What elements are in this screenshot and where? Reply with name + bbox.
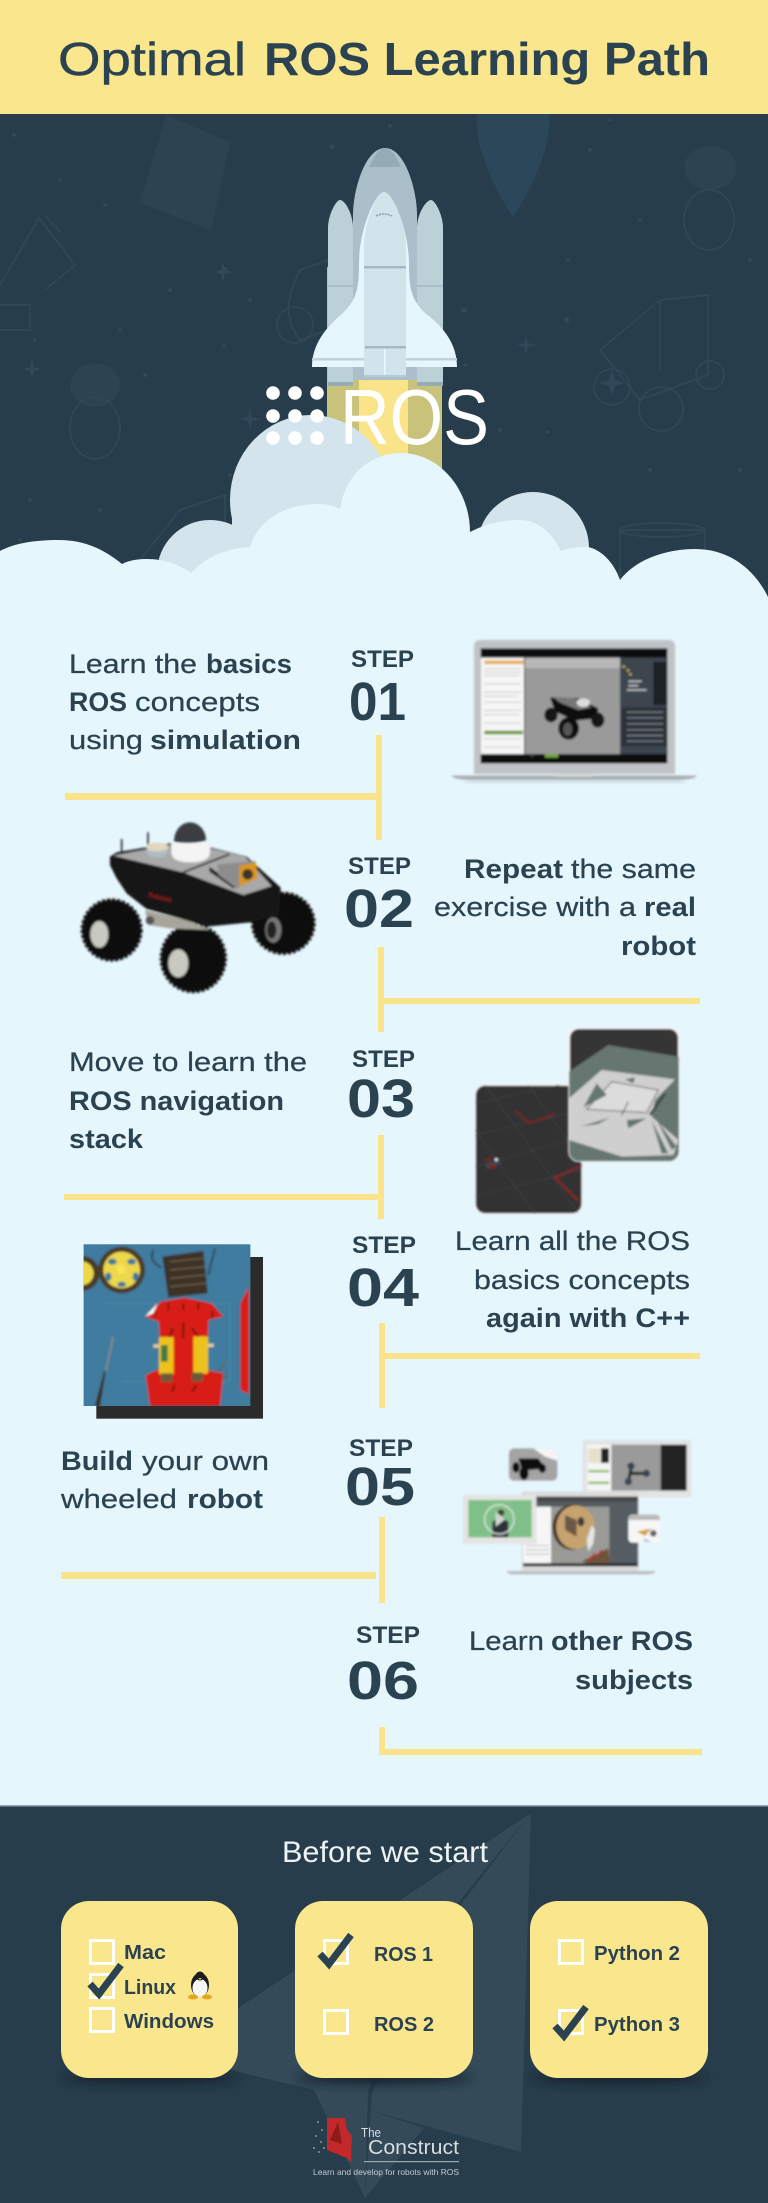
icon: linux penguin — [188, 1972, 212, 2000]
step 03 label — [347, 1046, 415, 1129]
step 02 text: real — [644, 892, 696, 922]
navigation screenshots — [475, 1028, 679, 1214]
logo text: Learn and develop for robots with ROS — [313, 2167, 459, 2177]
step 02 text: Repeat — [464, 854, 563, 884]
card: operating system: Windows — [124, 2011, 214, 2033]
step 05 label: STEP — [349, 1435, 413, 1462]
card: python version — [530, 1901, 708, 2084]
logo text: The — [361, 2125, 381, 2140]
step 03 — [69, 1028, 679, 1214]
main tank — [353, 148, 417, 380]
icon: check mark — [320, 1935, 351, 1964]
step 06 label: STEP — [356, 1622, 420, 1649]
card: operating system — [61, 1901, 238, 2084]
rocket — [312, 148, 457, 477]
sky background — [0, 114, 768, 614]
title — [58, 33, 710, 85]
step 02 text: the same — [571, 854, 696, 884]
step 04 text: basics concepts — [474, 1265, 690, 1295]
step 03 label: 03 — [347, 1069, 415, 1129]
robot photo: Robotnik — [148, 892, 173, 904]
step 01 text: ROS — [69, 687, 127, 717]
step 05 label — [345, 1435, 415, 1517]
step 03 text: ROS navigation — [69, 1086, 284, 1116]
footer heading: Before we start — [282, 1836, 489, 1869]
step 01 text: using — [69, 725, 143, 755]
step 04 — [65, 1226, 690, 1419]
card: python version: Python 2 — [594, 1943, 680, 1965]
step 02 label — [344, 853, 414, 939]
footer panel — [0, 1805, 768, 2203]
card: ros version — [295, 1901, 473, 2084]
step 02 text: exercise with a — [434, 892, 637, 922]
step 01 label: STEP — [351, 646, 414, 673]
the construct logo — [313, 2118, 459, 2177]
wheeled robot parts photo — [65, 1244, 263, 1419]
back clouds — [157, 415, 589, 626]
step 01 — [69, 640, 697, 783]
step 05 text: Build — [61, 1446, 133, 1476]
logo wordmark: ROS — [340, 373, 489, 461]
step 05 text: robot — [187, 1484, 263, 1514]
step 02 label: 02 — [344, 879, 414, 939]
step 02 — [82, 822, 696, 992]
flame — [327, 267, 442, 477]
step 05 label: 05 — [345, 1457, 415, 1517]
step 06 label — [347, 1622, 420, 1711]
step 04 label — [347, 1232, 419, 1318]
step 01 text — [69, 649, 301, 755]
course screenshots montage — [463, 1440, 691, 1577]
card: operating system: Mac — [124, 1942, 166, 1964]
card: python version: Python 3 — [594, 2014, 680, 2036]
ROS logo — [266, 373, 489, 461]
card: ros version: ROS 1 — [374, 1944, 433, 1966]
step 04 text — [455, 1226, 690, 1333]
step 06 text — [469, 1626, 693, 1695]
card: ros version: ROS 2 — [374, 2014, 434, 2036]
step 04 text: again with C++ — [486, 1303, 690, 1333]
icon: check mark — [90, 1965, 121, 1994]
header band — [0, 0, 768, 114]
step 06 — [347, 1622, 693, 1711]
background doodles — [0, 114, 752, 590]
step 01 text: simulation — [150, 725, 301, 755]
logo dots — [266, 386, 324, 445]
logo text: Construct — [368, 2137, 459, 2159]
title: Optimal — [58, 33, 246, 85]
front clouds and light panel — [0, 453, 768, 1807]
step 03 text: Move to learn the — [69, 1047, 307, 1077]
robot photo — [82, 822, 314, 992]
logo chair icon — [313, 2118, 352, 2162]
icon: check mark — [555, 2007, 586, 2036]
step 04 text: Learn all the ROS — [455, 1226, 690, 1256]
step 06 label: 06 — [347, 1651, 419, 1711]
step 06 text: Learn — [469, 1626, 544, 1656]
step 01 text: Learn the — [69, 649, 197, 679]
step 01 text: concepts — [135, 687, 260, 717]
paper plane watermark — [168, 1813, 531, 2198]
step 05 — [60, 1435, 691, 1577]
right booster — [417, 200, 443, 386]
step 03 text: stack — [69, 1124, 144, 1154]
orbiter — [312, 192, 457, 377]
robot tile — [509, 1448, 557, 1481]
card: operating system: Linux — [124, 1977, 176, 1999]
step 01 label: 01 — [349, 672, 406, 732]
laptop image — [452, 640, 697, 783]
step 05 text — [60, 1446, 269, 1514]
simulated robot — [544, 697, 604, 740]
step 02 text: robot — [621, 931, 696, 961]
video tile — [463, 1495, 536, 1544]
gazebo tile — [583, 1440, 691, 1497]
step 02 text — [434, 854, 696, 961]
step 05 text: your own — [142, 1446, 269, 1476]
step 04 label: 04 — [347, 1258, 419, 1318]
connector lines — [61, 735, 702, 1755]
left booster — [328, 200, 353, 386]
step 06 text: other ROS — [551, 1626, 693, 1656]
rviz view — [475, 1080, 582, 1214]
step 01 text: basics — [206, 649, 292, 679]
step 04 label: STEP — [352, 1232, 416, 1259]
step 03 text — [69, 1047, 307, 1154]
step 05 text: wheeled — [60, 1484, 177, 1514]
logo text — [313, 2125, 459, 2177]
occupancy map — [569, 1028, 679, 1161]
title: ROS Learning Path — [264, 33, 710, 85]
step 03 label: STEP — [352, 1046, 415, 1073]
step 02 label: STEP — [348, 853, 411, 880]
laptop — [507, 1492, 655, 1574]
side tile — [628, 1515, 660, 1543]
step 01 label — [349, 646, 414, 732]
step 06 text: subjects — [575, 1665, 693, 1695]
